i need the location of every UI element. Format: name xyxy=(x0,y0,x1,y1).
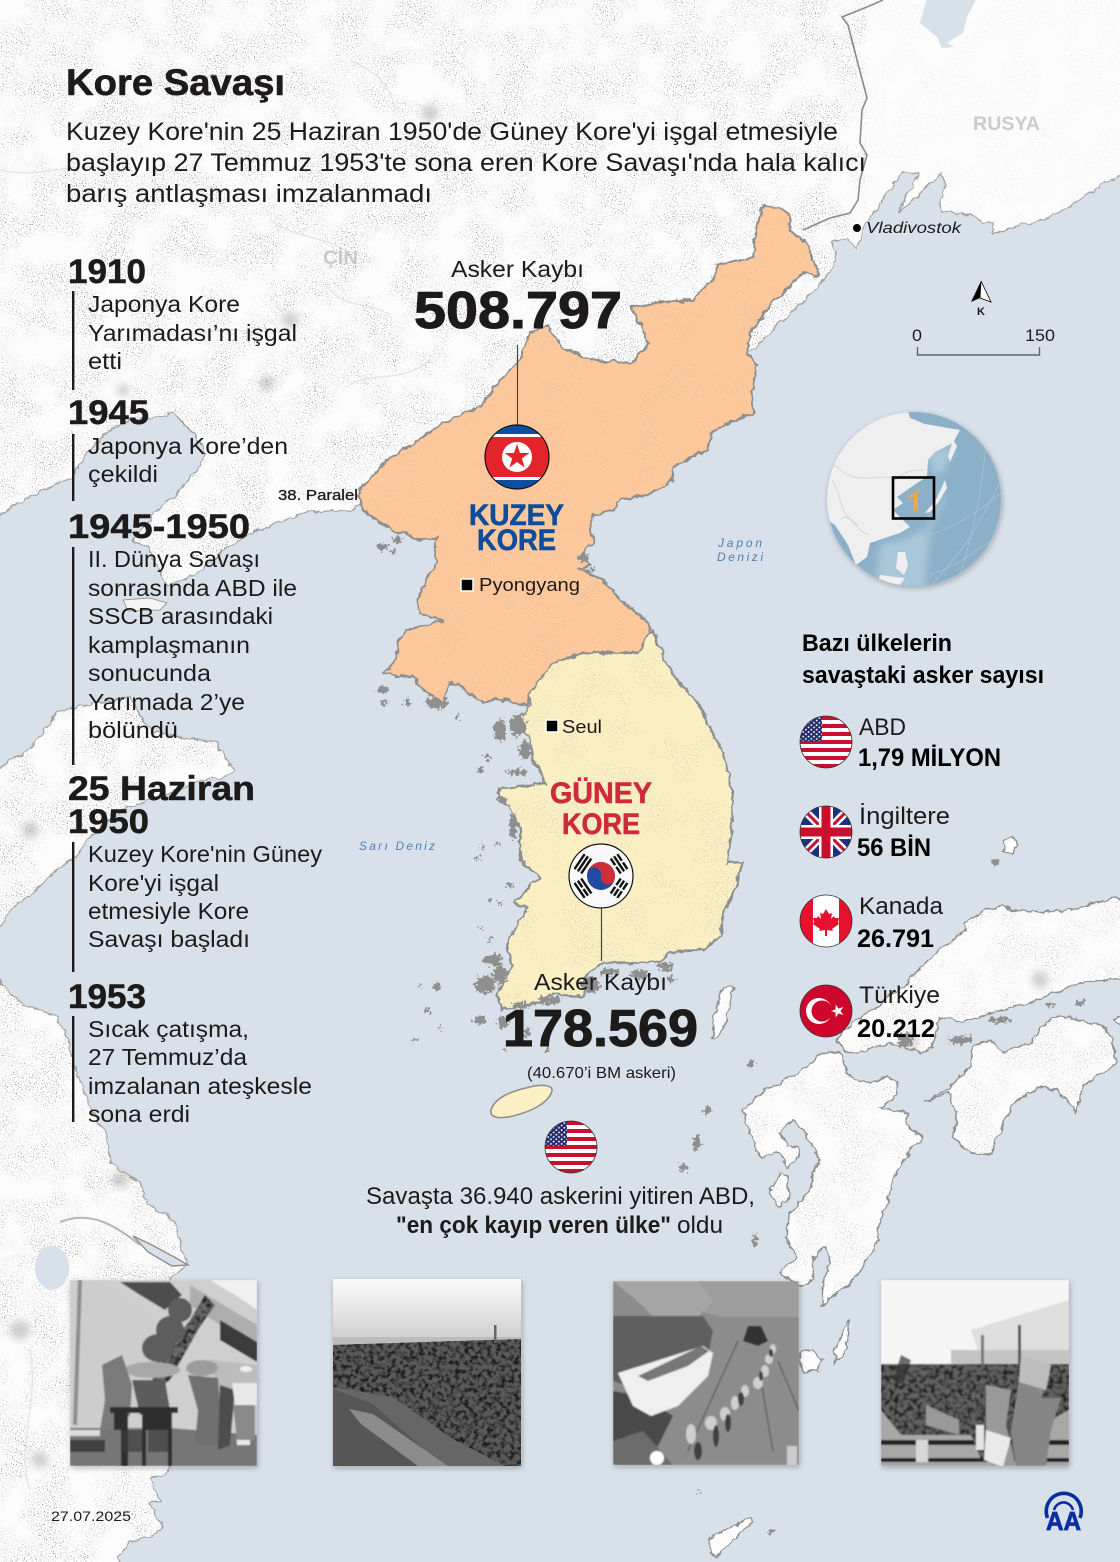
intro text: Kuzey Kore'nin 25 Haziran 1950'de Güney Kore'yi işgal etmesiyle xyxy=(66,118,838,146)
China Russia border xyxy=(803,0,883,230)
rivers and lakes xyxy=(0,60,430,1490)
map labels: countries and seas: Denizi xyxy=(717,550,763,564)
leader line south xyxy=(600,908,602,961)
country: ABD: ABD xyxy=(859,714,906,741)
intro text: başlayıp 27 Temmuz 1953'te sona eren Kore Savaşı'nda hala kalıcı xyxy=(66,149,866,177)
scale bar: 0 xyxy=(912,326,922,345)
timeline: 25 Haziran 1950: Savaşı başladı xyxy=(88,926,250,952)
country: Kanada xyxy=(800,894,944,948)
callout: ABD casualties: Savaşta 36.940 askerini yitiren ABD, xyxy=(366,1183,755,1210)
map: Jeju island xyxy=(491,1085,552,1118)
timeline: 1910 xyxy=(68,253,297,390)
photo 2: soldiers seated on shore xyxy=(330,1278,526,1472)
flag: Güney Kore xyxy=(569,844,633,908)
intro text xyxy=(66,118,866,208)
leader line north xyxy=(516,345,518,430)
timeline: 25 Haziran 1950: etmesiyle Kore xyxy=(88,898,249,924)
Yangtze estuary xyxy=(133,1236,188,1266)
map: Kuzey Kore territory xyxy=(350,200,830,720)
city: Pyongyang: Pyongyang xyxy=(479,575,580,595)
map labels: countries and seas: 38. Paralel xyxy=(278,487,358,504)
country: Türkiye: 20.212 xyxy=(857,1015,935,1043)
south kore casualties: Asker Kaybı xyxy=(534,969,667,995)
country: Kanada: Kanada xyxy=(859,893,944,920)
timeline: 1945-1950: sonrasında ABD ile xyxy=(88,575,297,601)
timeline: 1945-1950: SSCB arasındaki xyxy=(88,603,273,629)
heading: troop numbers: Bazı ülkelerin xyxy=(802,630,952,657)
map: offshore islands xyxy=(378,537,1085,1534)
timeline: 1945: Japonya Kore’den xyxy=(88,433,288,459)
callout: ABD casualties: oldu xyxy=(677,1212,723,1239)
country: İngiltere: 56 BİN xyxy=(857,834,931,862)
map: Güney Kore territory xyxy=(495,628,744,1012)
country: İngiltere: İngiltere xyxy=(859,803,950,830)
heading: troop numbers: savaştaki asker sayısı xyxy=(802,662,1044,689)
country: Türkiye: Türkiye xyxy=(859,982,940,1009)
flag: ABD casualties xyxy=(545,1121,597,1173)
south kore casualties xyxy=(503,969,698,1082)
timeline: 1945: 1945 xyxy=(68,394,149,432)
Bohai coast detail xyxy=(123,598,167,611)
icon: north arrow: K xyxy=(977,306,985,318)
date: 27.07.2025 xyxy=(51,1508,131,1524)
label: Güney Kore: GÜNEY xyxy=(550,777,652,810)
country: Kanada: 26.791 xyxy=(857,925,934,953)
country: ABD xyxy=(800,714,1001,772)
timeline: 1953 xyxy=(68,978,312,1127)
photo 4: soldiers carrying suitcases xyxy=(879,1279,1073,1471)
city: Seul: Seul xyxy=(562,717,602,737)
timeline: 1945-1950 xyxy=(68,508,297,765)
timeline: 1953: sona erdi xyxy=(88,1101,190,1127)
timeline: 1910: 1910 xyxy=(68,253,146,291)
title: Kore Savaşı xyxy=(66,62,285,103)
timeline: 1953: Sıcak çatışma, xyxy=(88,1016,249,1042)
map labels: countries and seas: RUSYA xyxy=(973,114,1040,135)
south kore casualties: 178.569 xyxy=(503,1000,698,1058)
map labels: countries and seas xyxy=(278,114,1040,853)
map labels: countries and seas: Vladivostok xyxy=(866,220,962,237)
timeline: 1910: etti xyxy=(88,348,122,374)
timeline: 25 Haziran 1950: 25 Haziran xyxy=(68,770,255,808)
timeline: 1945-1950: bölündü xyxy=(88,717,178,743)
timeline: 25 Haziran 1950: Kuzey Kore'nin Güney xyxy=(88,841,323,867)
north kore casualties xyxy=(414,256,622,340)
timeline: 1945-1950: 1945-1950 xyxy=(68,508,250,546)
logo: AA xyxy=(1046,1493,1081,1536)
country: ABD: 1,79 MİLYON xyxy=(858,744,1001,772)
callout: ABD casualties: "en çok kayıp veren ülke" xyxy=(396,1212,671,1239)
timeline: 1945 xyxy=(68,394,288,501)
photo 3: troops walking on dock xyxy=(611,1280,803,1470)
timeline: 25 Haziran 1950 xyxy=(68,770,323,972)
country: İngiltere xyxy=(800,803,950,862)
intro text: barış antlaşması imzalanmadı xyxy=(66,180,432,208)
timeline: 1953: imzalanan ateşkesle xyxy=(88,1073,312,1099)
map: south and west coast island clusters xyxy=(474,553,676,1037)
north kore casualties: 508.797 xyxy=(414,282,622,340)
timeline: 1910: Yarımadası’nı işgal xyxy=(88,320,297,346)
scale bar: 150 xyxy=(1025,326,1055,345)
timeline: 25 Haziran 1950: 1950 xyxy=(68,803,149,841)
label: Kuzey Kore xyxy=(469,499,564,557)
north kore casualties: Asker Kaybı xyxy=(451,256,584,282)
map labels: countries and seas: Japon xyxy=(717,536,762,550)
photo 1: soldiers boarding ship xyxy=(68,1279,261,1471)
map labels: countries and seas: Sarı Deniz xyxy=(359,839,435,853)
city: Seul xyxy=(546,717,602,737)
label: Kuzey Kore: KORE xyxy=(477,524,556,557)
icon: north arrow xyxy=(971,281,991,318)
label: Güney Kore: KORE xyxy=(562,808,640,841)
label: Güney Kore xyxy=(550,777,652,841)
scale bar xyxy=(912,326,1055,355)
timeline: 1945-1950: sonucunda xyxy=(88,660,211,686)
timeline: 1945: çekildi xyxy=(88,461,158,487)
timeline: 1953: 1953 xyxy=(68,978,146,1016)
callout: ABD casualties xyxy=(366,1183,755,1239)
heading: troop numbers xyxy=(802,630,1044,689)
country: Türkiye xyxy=(800,982,940,1043)
locator globe xyxy=(820,400,1005,592)
timeline: 1953: 27 Temmuz’da xyxy=(88,1044,247,1070)
Taihu lake xyxy=(35,1246,69,1290)
label: Kuzey Kore: KUZEY xyxy=(469,499,564,532)
timeline: 25 Haziran 1950: Kore'yi işgal xyxy=(88,870,219,896)
timeline: 1910: Japonya Kore xyxy=(88,291,240,317)
south kore casualties: (40.670’i BM askeri) xyxy=(527,1065,676,1082)
timeline: 1945-1950: kamplaşmanın xyxy=(88,632,250,658)
logo: AA: AA xyxy=(1046,1506,1081,1536)
flag: Kuzey Kore xyxy=(485,425,549,489)
lake Khanka xyxy=(920,0,977,48)
timeline: 1945-1950: II. Dünya Savaşı xyxy=(88,546,260,572)
timeline: 1945-1950: Yarımada 2’ye xyxy=(88,689,245,715)
map labels: countries and seas: ÇİN xyxy=(323,248,358,269)
